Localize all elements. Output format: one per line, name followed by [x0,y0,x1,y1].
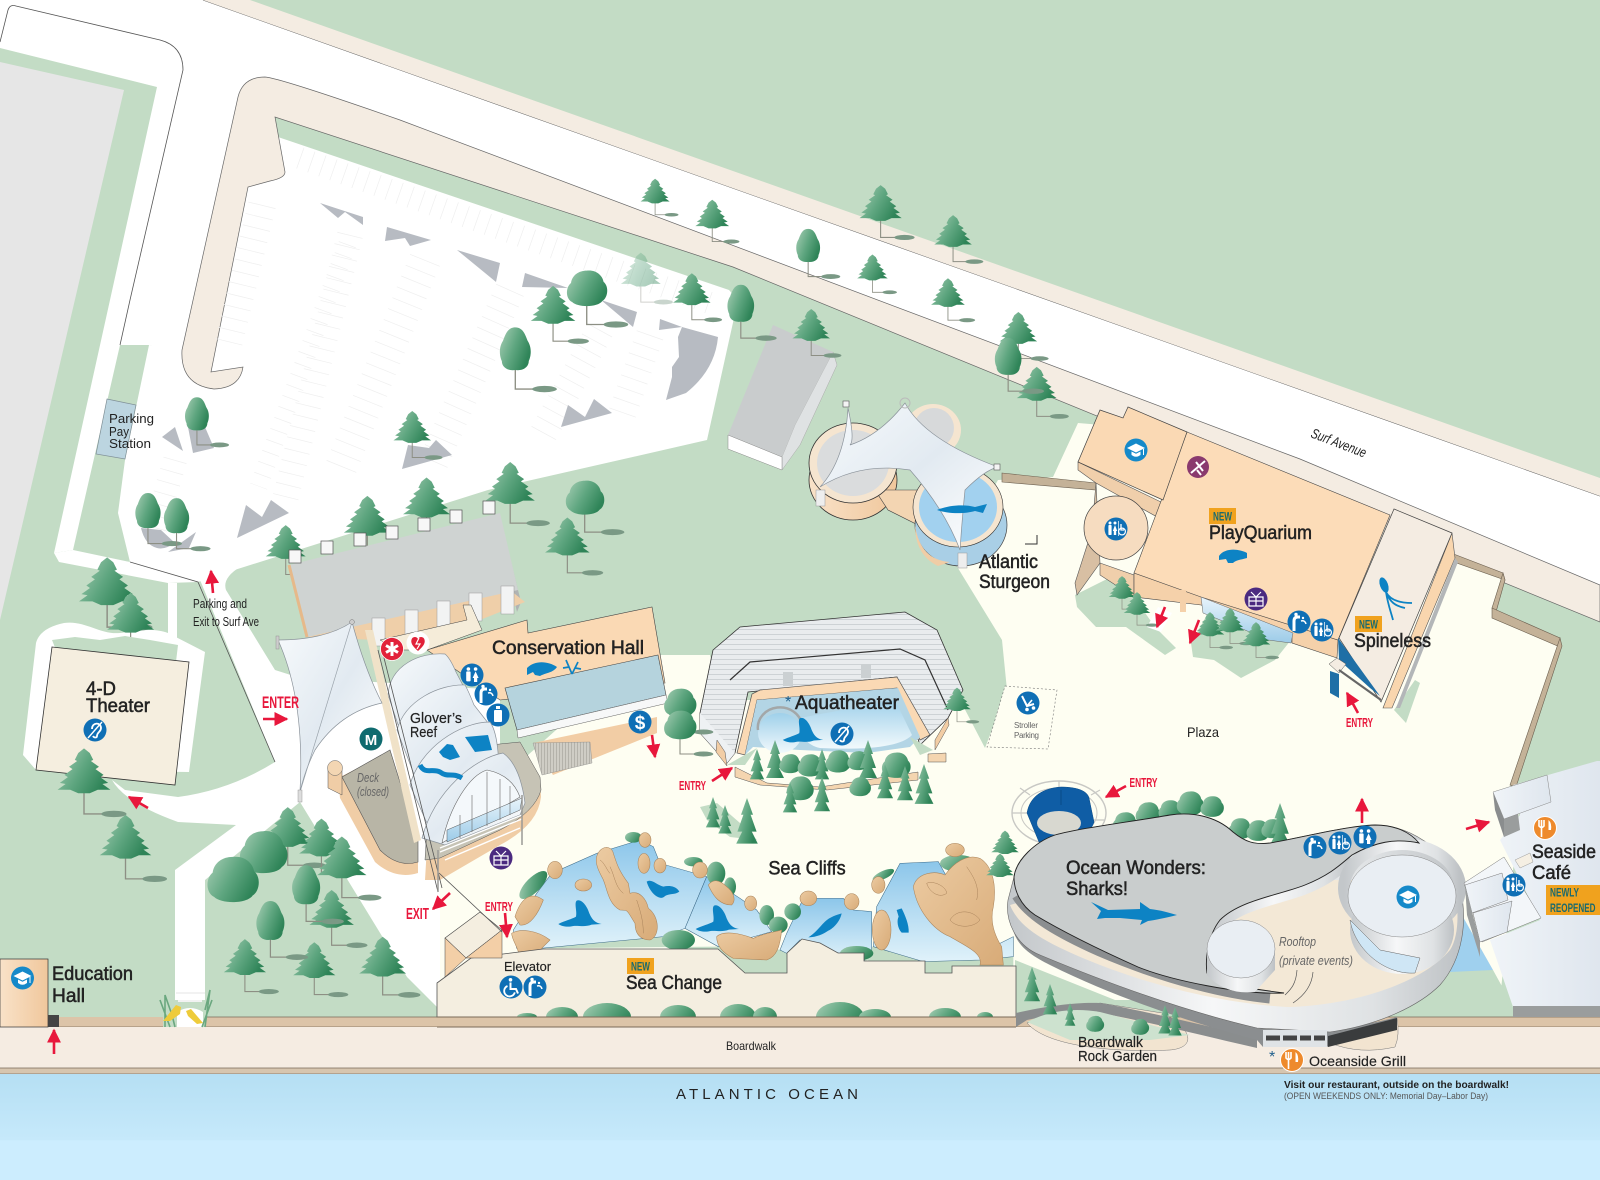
conservation hall: $ [635,713,646,734]
seaside water [1450,917,1493,972]
grey outbuilding [728,325,837,470]
enter label: ENTER [262,693,299,712]
seaside cafe building: Café [1532,863,1571,884]
sea cliffs pools [512,832,1013,977]
education hall: Education [52,964,133,985]
spineless building [1329,509,1458,708]
4-D Theater: 4-D [86,679,116,700]
glover's reef building: Reef [410,724,438,741]
parking lot islands [141,203,718,552]
seaside cafe building [1464,761,1600,1017]
wall from sturgeon to playquarium [1002,473,1096,490]
parking pay station: Pay [109,424,129,439]
icon: metro M: M [365,732,377,749]
plaza label: Plaza [1187,724,1219,740]
oceanside grill: Oceanside Grill [1309,1053,1406,1069]
parking exit label: Exit to Surf Ave [193,614,259,629]
glover's reef building: Deck [357,770,380,785]
education hall: Hall [52,986,85,1007]
ocean [0,1074,1600,1180]
entry label: aquatheater: ENTRY [679,778,706,793]
green beds near plaza [700,577,1515,1017]
atlantic sturgeon building: Sturgeon [979,572,1050,593]
direction arrows [54,571,1489,1054]
plaza east wall [1451,553,1562,787]
pool two [685,877,772,947]
exit label: EXIT [406,906,429,923]
playquarium building [1075,407,1390,658]
parking pay station: Station [109,436,151,451]
stroller parking: Stroller [1014,721,1038,730]
aquatheater: Aquatheater [795,693,900,714]
conservation hall [380,605,668,775]
parking pay station [96,399,154,459]
aquatheater planting [664,688,979,844]
atlantic sturgeon building: Atlantic [979,552,1038,573]
ocean wonders building: Rooftop [1279,934,1316,949]
4-D Theater [36,636,189,785]
spineless building: NEW [1359,618,1378,632]
rocks [512,833,1003,965]
entry label: sharks: ENTRY [1130,775,1158,790]
icon: metro M [360,728,382,750]
trees near playquarium [1109,576,1279,659]
sea change building: Sea Change [626,973,722,994]
trees behind ocean wonders [986,791,1290,877]
playquarium building: NEW [1213,510,1232,524]
glover's reef building: (closed) [357,784,389,799]
wall under sea change [437,1017,1016,1027]
pool three [780,898,872,962]
4-D Theater: Theater [86,696,151,717]
aquatheater [700,612,963,766]
parking exit label [193,596,259,629]
surf avenue label: Surf Avenue [1309,425,1369,461]
sea change building: Elevator [504,959,552,974]
parking pay station: Parking [109,411,154,426]
rock garden label [1078,1034,1157,1065]
rock garden label: Boardwalk [1078,1034,1143,1051]
boardwalk wall [47,1017,1600,1027]
pool animals [558,881,909,937]
boardwalk: Boardwalk [726,1039,777,1053]
sea change building: NEW [631,960,650,974]
spineless building: Spineless [1354,631,1431,652]
tree in front of 4-D Theater [58,748,127,817]
upper sidewalk [203,0,1600,496]
seaside cafe building: Seaside [1532,842,1596,863]
icon: defibrillator [406,632,430,654]
ocean: ATLANTIC OCEAN [676,1086,863,1103]
road outlines [0,0,1600,762]
gray rooftop behind conservation hall [289,501,525,646]
restaurant note: (OPEN WEEKENDS ONLY: Memorial Day–Labor Day) [1284,1091,1488,1101]
pool four [873,862,1013,962]
restaurant note [1284,1080,1509,1101]
trees behind the buildings [79,179,1069,998]
parking stall lines [155,158,710,530]
ocean wonders building: Sharks! [1066,879,1128,900]
seaside cafe building: NEWLY [1550,886,1579,900]
restaurant note: Visit our restaurant, outside on the boardwalk! [1284,1080,1509,1091]
sea change building [437,873,1016,1032]
pool one [513,840,707,948]
sidewalk along surf avenue [182,77,1600,622]
glover's reef building: Glover’s [410,710,462,727]
rock garden label: Rock Garden [1078,1048,1157,1065]
conservation hall: Conservation Hall [492,638,644,659]
stroller parking [987,686,1057,749]
education hall [0,959,133,1027]
ocean wonders building: Ocean Wonders: [1066,858,1206,879]
stroller parking: Parking [1014,731,1039,740]
planting at pools [515,832,977,961]
south gate with sculptures [160,990,212,1027]
ocean wonders building [1007,814,1464,1051]
rock garden trees [1024,967,1182,1036]
shark tank ring and blue cylinder [1012,781,1106,845]
oceanside grill [1269,1048,1406,1072]
sea cliffs pools: Sea Cliffs [768,858,846,879]
entry label: sea change: ENTRY [485,899,513,914]
entry label: spineless: ENTRY [1346,715,1373,730]
parking exit label: Parking and [193,596,247,611]
left grey lot [0,62,124,620]
glover's reef building [328,630,541,892]
boardwalk [0,1027,1600,1074]
oceanside grill: * [1269,1049,1275,1066]
ocean wonders building: (private events) [1279,953,1353,968]
playquarium building: PlayQuarium [1209,523,1312,544]
aquatheater: * [785,694,791,711]
entry tent [276,620,382,802]
atlantic sturgeon building [809,398,1050,593]
icon: first aid [380,638,404,660]
plaza [440,423,1560,1017]
